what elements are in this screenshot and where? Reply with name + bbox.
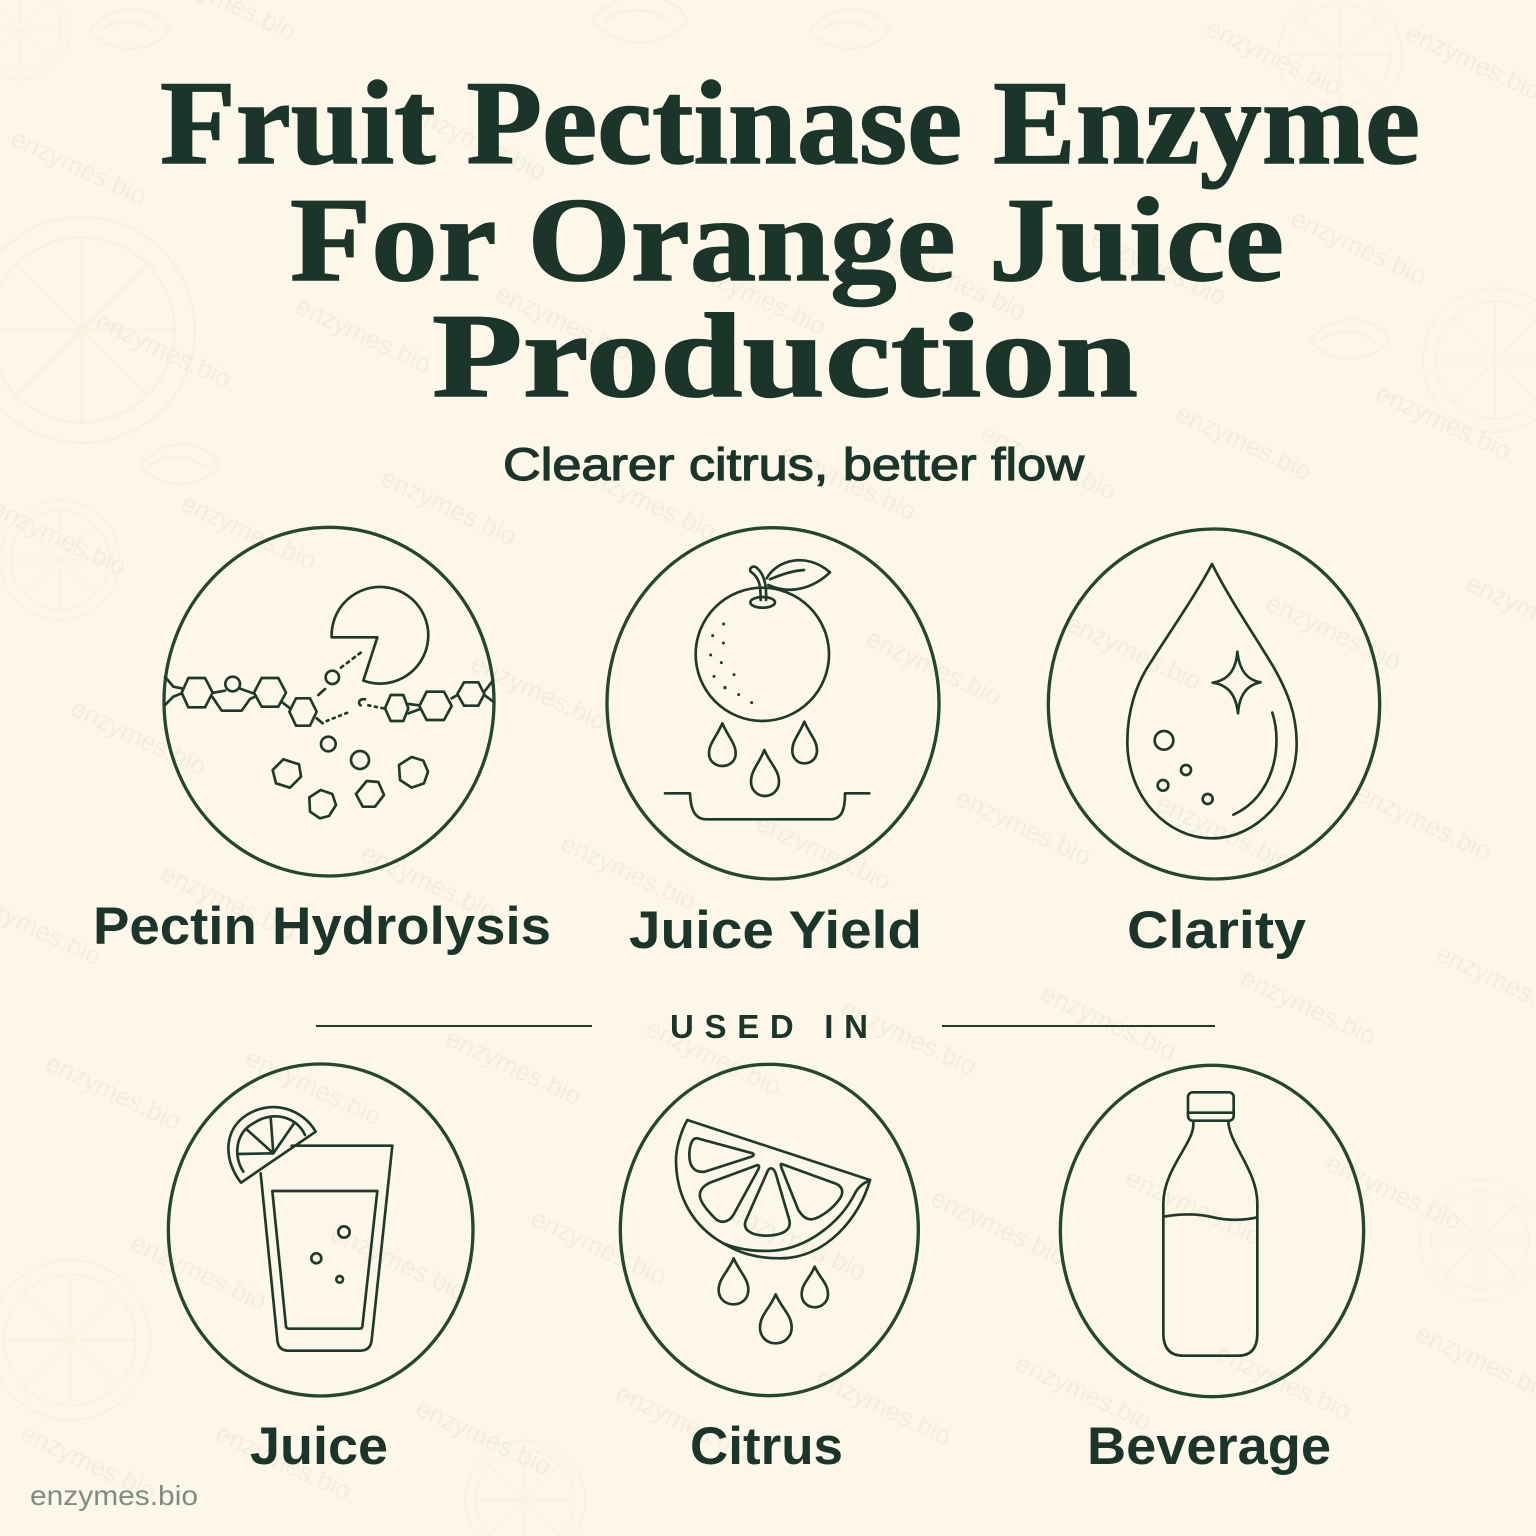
title bbox=[160, 56, 1420, 422]
icon: juice yield bbox=[607, 528, 939, 879]
watermark pattern: enzymes.bio bbox=[886, 237, 1031, 326]
watermark pattern: enzymes.bio bbox=[441, 1022, 586, 1111]
watermark pattern: enzymes.bio bbox=[1086, 222, 1231, 311]
watermark pattern: enzymes.bio bbox=[951, 782, 1096, 871]
watermark pattern: enzymes.bio bbox=[211, 1417, 356, 1506]
watermark pattern: enzymes.bio bbox=[641, 1012, 786, 1101]
watermark pattern: enzymes.bio bbox=[1036, 977, 1181, 1066]
watermark pattern: enzymes.bio bbox=[976, 417, 1121, 506]
footer brand: enzymes.bio bbox=[30, 1480, 198, 1511]
title: Fruit Pectinase Enzyme bbox=[160, 56, 1420, 189]
watermark pattern: enzymes.bio bbox=[41, 1047, 186, 1136]
watermark pattern: enzymes.bio bbox=[156, 857, 301, 946]
icon: pectin hydrolysis bbox=[164, 527, 494, 876]
watermark pattern: enzymes.bio bbox=[1211, 1337, 1356, 1426]
icon: beverage bottle bbox=[1060, 1065, 1364, 1397]
watermark pattern: enzymes.bio bbox=[176, 487, 321, 576]
watermark pattern: enzymes.bio bbox=[1321, 1147, 1466, 1236]
watermark pattern: enzymes.bio bbox=[126, 1227, 271, 1316]
label: Pectin Hydrolysis: Pectin Hydrolysis bbox=[93, 897, 551, 956]
watermark pattern: enzymes.bio bbox=[686, 252, 831, 341]
watermark pattern: enzymes.bio bbox=[1061, 607, 1206, 696]
divider: used in: USED IN bbox=[670, 1008, 868, 1045]
label: Juice: Juice bbox=[250, 1417, 388, 1476]
watermark pattern: enzymes.bio bbox=[1121, 1162, 1266, 1251]
label: Beverage: Beverage bbox=[1087, 1417, 1331, 1476]
watermark pattern: enzymes.bio bbox=[1261, 587, 1406, 676]
watermark pattern: enzymes.bio bbox=[751, 807, 896, 896]
watermark pattern: enzymes.bio bbox=[556, 827, 701, 916]
watermark pattern: enzymes.bio bbox=[1151, 787, 1296, 876]
watermark pattern: enzymes.bio bbox=[1011, 1347, 1156, 1436]
title: For Orange Juice bbox=[290, 173, 1284, 307]
watermark pattern: enzymes.bio bbox=[1371, 377, 1516, 466]
watermark pattern: enzymes.bio bbox=[1286, 202, 1431, 291]
subtitle: Clearer citrus, better flow bbox=[503, 439, 1085, 490]
icon: citrus slice bbox=[620, 1064, 918, 1396]
watermark pattern: enzymes.bio bbox=[326, 1217, 471, 1306]
watermark pattern: enzymes.bio bbox=[16, 1417, 161, 1506]
title: Production bbox=[432, 289, 1138, 422]
icon: juice glass bbox=[168, 1064, 473, 1396]
watermark pattern: enzymes.bio bbox=[1171, 397, 1316, 486]
icon: clarity bbox=[1048, 529, 1380, 879]
watermark pattern: enzymes.bio bbox=[356, 837, 501, 926]
watermark pattern: enzymes.bio bbox=[726, 1197, 871, 1286]
watermark pattern: enzymes.bio bbox=[466, 647, 611, 736]
watermark pattern: enzymes.bio bbox=[6, 122, 151, 211]
label: Citrus: Citrus bbox=[690, 1417, 843, 1476]
watermark pattern: enzymes.bio bbox=[576, 457, 721, 546]
label: Juice Yield: Juice Yield bbox=[629, 901, 922, 960]
watermark pattern: enzymes.bio bbox=[241, 1042, 386, 1131]
watermark pattern: enzymes.bio bbox=[836, 992, 981, 1081]
watermark pattern: enzymes.bio bbox=[406, 97, 551, 186]
watermark pattern: enzymes.bio bbox=[66, 692, 211, 781]
label: Clarity: Clarity bbox=[1127, 901, 1307, 960]
watermark pattern: enzymes.bio bbox=[291, 290, 436, 379]
watermark pattern: enzymes.bio bbox=[491, 277, 636, 366]
watermark pattern: enzymes.bio bbox=[811, 1362, 956, 1451]
watermark pattern: enzymes.bio bbox=[1201, 12, 1346, 101]
watermark pattern: enzymes.bio bbox=[1236, 962, 1381, 1051]
watermark pattern: enzymes.bio bbox=[776, 437, 921, 526]
watermark pattern: enzymes.bio bbox=[1351, 777, 1496, 866]
watermark pattern: enzymes.bio bbox=[411, 1392, 556, 1481]
watermark pattern: enzymes.bio bbox=[376, 462, 521, 551]
watermark pattern: enzymes.bio bbox=[91, 305, 236, 394]
watermark pattern: enzymes.bio bbox=[611, 1377, 756, 1466]
watermark pattern: enzymes.bio bbox=[926, 1182, 1071, 1271]
watermark pattern: enzymes.bio bbox=[861, 622, 1006, 711]
watermark pattern: enzymes.bio bbox=[526, 1202, 671, 1291]
